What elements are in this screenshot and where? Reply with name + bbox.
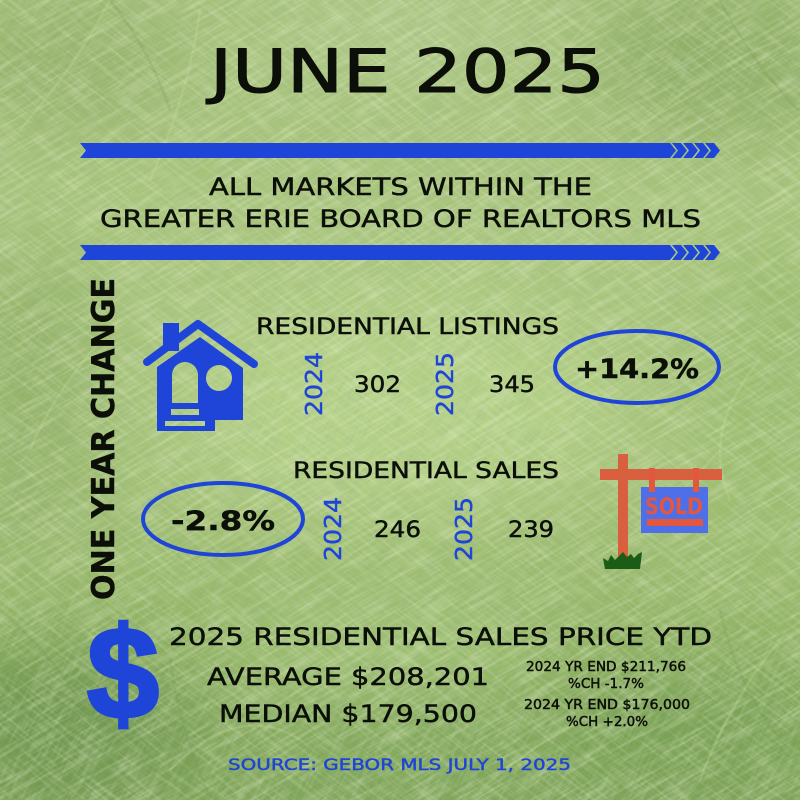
average comparison note: [526, 660, 686, 692]
top arrow banner: [80, 143, 720, 158]
title: JUNE 2025: [205, 37, 605, 107]
source note: SOURCE: GEBOR MLS JULY 1, 2025: [228, 755, 571, 774]
icon: sold sign: SOLD: [645, 495, 703, 520]
median comparison note: 2024 YR END $176,000: [524, 698, 690, 713]
listings data: 302: [354, 373, 401, 398]
icon: sold sign: [600, 454, 722, 569]
callout: listings change: [555, 331, 719, 403]
icon: dollar sign: $: [87, 600, 159, 746]
sales data: 239: [508, 518, 554, 543]
bottom arrow banner: [80, 245, 720, 260]
icon: house: [147, 323, 254, 431]
callout: sales change: [143, 483, 303, 555]
subtitle: GREATER ERIE BOARD OF REALTORS MLS: [100, 205, 701, 233]
callout: listings change: +14.2%: [575, 354, 699, 385]
listings data: 345: [489, 373, 535, 398]
median comparison note: %CH +2.0%: [566, 715, 648, 730]
sales data: 2025: [452, 497, 478, 561]
sales data: 2024: [321, 497, 347, 561]
callout: sales change: -2.8%: [171, 506, 275, 537]
sales data: [321, 497, 554, 561]
listings data: [302, 352, 535, 416]
subtitle: [100, 173, 701, 233]
sales heading: RESIDENTIAL SALES: [293, 459, 559, 484]
side heading: one year change: ONE YEAR CHANGE: [86, 278, 122, 600]
median price: MEDIAN $179,500: [219, 700, 477, 728]
listings data: 2024: [302, 352, 328, 416]
subtitle: ALL MARKETS WITHIN THE: [209, 173, 592, 201]
price heading: 2025 RESIDENTIAL SALES PRICE YTD: [169, 623, 712, 651]
listings heading: RESIDENTIAL LISTINGS: [256, 315, 559, 340]
median comparison note: [524, 698, 690, 730]
average price: AVERAGE $208,201: [207, 663, 489, 691]
average comparison note: 2024 YR END $211,766: [526, 660, 686, 675]
average comparison note: %CH -1.7%: [568, 677, 644, 692]
listings data: 2025: [433, 352, 459, 416]
sales data: 246: [374, 518, 421, 543]
